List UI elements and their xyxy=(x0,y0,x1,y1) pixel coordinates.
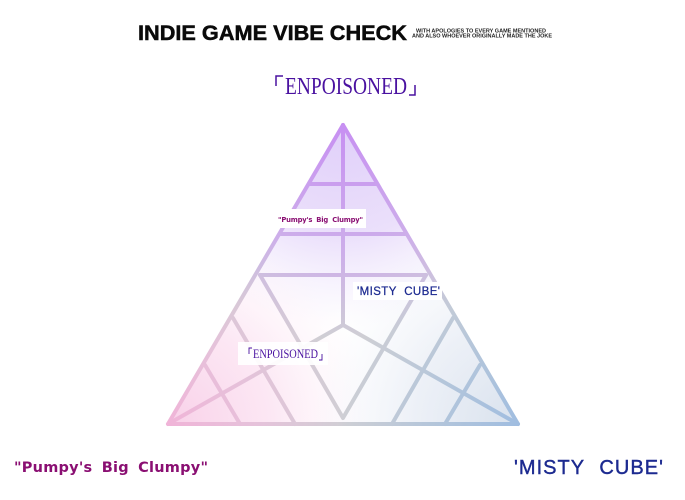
top vertex label: ENPOISONED: ENPOISONED xyxy=(285,74,407,100)
chart label: ENPOISONED: ENPOISONED xyxy=(253,347,318,361)
chart label: ENPOISONED xyxy=(238,342,328,365)
right vertex label: MISTY CUBE: 'MISTY CUBE' xyxy=(514,457,663,479)
left vertex label: Pumpy's Big Clumpy: "Pumpy's Big Clumpy" xyxy=(14,460,208,476)
ternary triangle chart xyxy=(166,122,520,426)
subtitle note: AND ALSO WHOEVER ORIGINALLY MADE THE JOKE xyxy=(412,34,552,40)
chart label: Pumpy's Big Clumpy: "Pumpy's Big Clumpy" xyxy=(278,216,363,224)
subtitle note: WITH APOLOGIES TO EVERY GAME MENTIONED xyxy=(416,28,546,34)
chart label: MISTY CUBE: 'MISTY CUBE' xyxy=(357,286,440,298)
chart label: Pumpy's Big Clumpy xyxy=(275,209,366,228)
triangle gradient fill xyxy=(168,125,518,424)
title: INDIE GAME VIBE CHECK xyxy=(138,22,407,45)
subtitle note xyxy=(412,28,552,40)
chart label: MISTY CUBE xyxy=(353,282,442,300)
triangle grid lines xyxy=(166,122,520,426)
